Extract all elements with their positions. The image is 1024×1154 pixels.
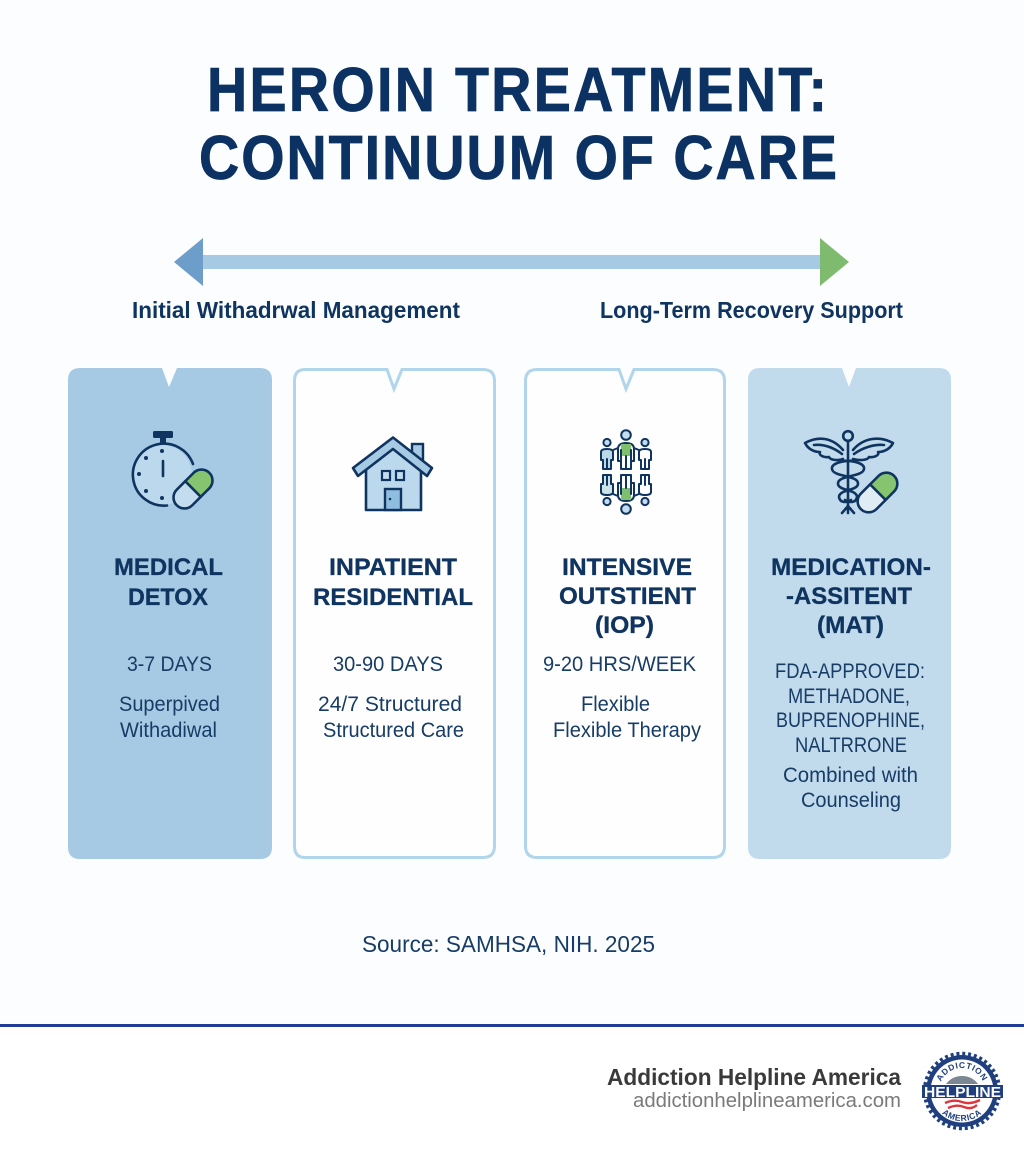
heading [313, 554, 473, 611]
logo badge: AMERICA [942, 1110, 982, 1122]
footer band [0, 1024, 1024, 1154]
heading: OUTSTIENT [559, 583, 696, 610]
description: Superpived [119, 693, 220, 716]
description: Withadiwal [120, 719, 217, 742]
logo badge: ADDICTION [937, 1062, 988, 1082]
heading [771, 554, 931, 639]
left arrow label: Initial Withadrwal Management [132, 297, 460, 323]
panel: medical detox [68, 368, 272, 859]
bottom row of people [601, 475, 651, 514]
heading: MEDICAL [114, 554, 223, 581]
medications: METHADONE, [788, 685, 910, 708]
continuum arrow [174, 238, 849, 286]
title: HEROIN TREATMENT: [207, 54, 827, 125]
right arrow label: Long-Term Recovery Support [600, 297, 903, 323]
description: 24/7 Structured [318, 693, 462, 716]
description: Flexible [581, 693, 650, 716]
heading: MEDICATION- [771, 554, 931, 581]
brand url: addictionhelplineamerica.com [633, 1090, 901, 1112]
medications: BUPRENOPHINE, [776, 709, 925, 732]
description [119, 693, 220, 742]
heading [114, 554, 223, 611]
heading: DETOX [128, 584, 209, 611]
heading: INPATIENT [329, 554, 457, 581]
heading: (IOP) [595, 612, 654, 639]
duration: 3-7 DAYS [127, 653, 212, 676]
panel: medication-assisted treatment [748, 368, 951, 859]
medications [775, 660, 925, 757]
heading [559, 554, 696, 639]
description [318, 693, 464, 742]
brand name: Addiction Helpline America [607, 1064, 902, 1090]
heading: -ASSITENT [786, 583, 912, 610]
panel: intensive outpatient [526, 370, 724, 858]
top row of people [601, 430, 651, 469]
duration: 9-20 HRS/WEEK [543, 653, 696, 676]
medications: NALTRRONE [795, 734, 907, 757]
description [553, 693, 701, 742]
panel: inpatient residential [294, 370, 494, 858]
description: Flexible Therapy [553, 719, 701, 742]
logo badge [922, 1052, 1003, 1130]
icon: caduceus and pill [805, 431, 902, 517]
icon: group of people [601, 430, 651, 514]
description: Structured Care [323, 719, 464, 742]
icon: house [353, 438, 432, 510]
icon: stopwatch and pill [132, 431, 217, 513]
description: Counseling [801, 789, 901, 812]
heading: (MAT) [817, 612, 884, 639]
description [783, 764, 918, 812]
title [199, 54, 837, 193]
logo badge: HELPLINE [924, 1085, 1001, 1101]
duration: 30-90 DAYS [333, 653, 443, 676]
heading: INTENSIVE [562, 554, 692, 581]
title: CONTINUUM OF CARE [199, 122, 837, 193]
source note: Source: SAMHSA, NIH. 2025 [362, 931, 655, 957]
heading: RESIDENTIAL [313, 584, 473, 611]
description: Combined with [783, 764, 918, 787]
medications: FDA-APPROVED: [775, 660, 925, 683]
